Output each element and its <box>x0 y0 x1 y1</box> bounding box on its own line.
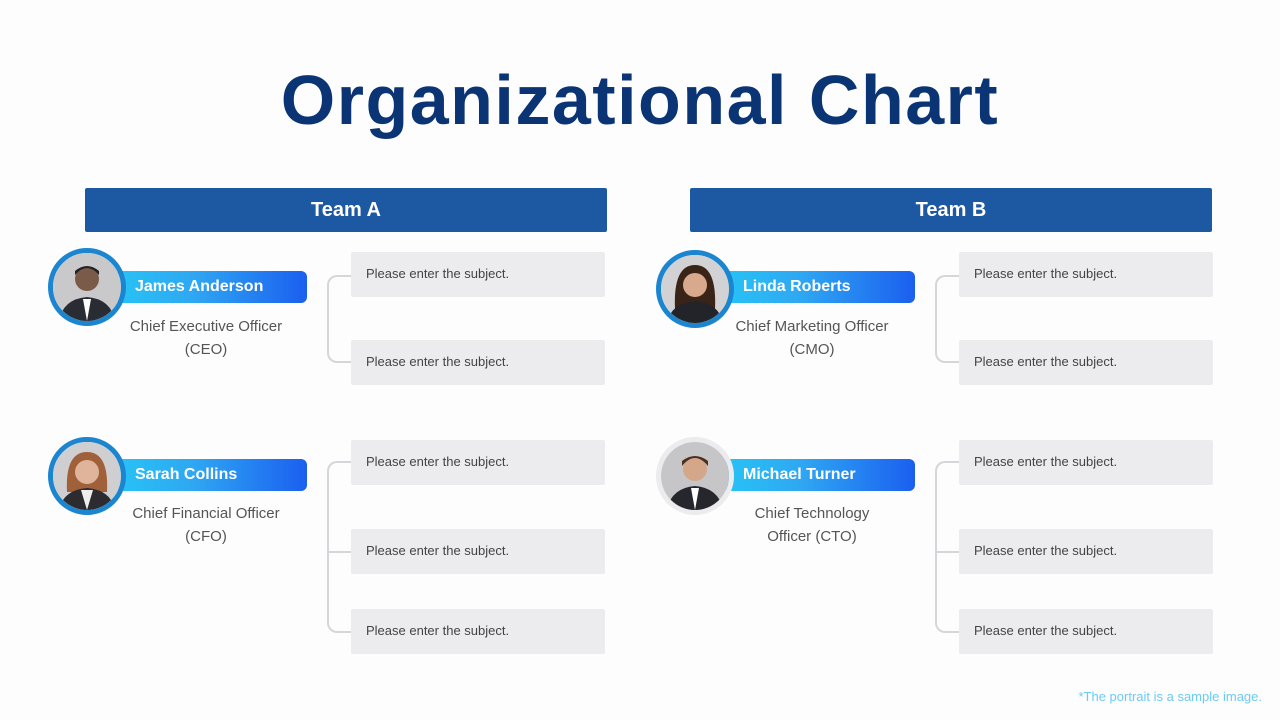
name pill: Michael Turner <box>743 466 856 483</box>
subject boxes: Please enter the subject. <box>974 266 1117 281</box>
subject boxes: Please enter the subject. <box>366 623 509 638</box>
portrait <box>656 250 734 328</box>
role: (CMO) <box>790 341 834 358</box>
person: Sarah Collins <box>48 437 307 545</box>
role: (CEO) <box>185 341 227 358</box>
subject boxes: Please enter the subject. <box>366 543 509 558</box>
person: Michael Turner <box>656 437 915 545</box>
name pill: James Anderson <box>135 278 263 295</box>
role <box>130 318 282 358</box>
role: (CFO) <box>185 528 227 545</box>
person: Linda Roberts <box>656 250 915 358</box>
role <box>132 505 280 545</box>
subject boxes: Please enter the subject. <box>366 454 509 469</box>
footnote: *The portrait is a sample image. <box>1078 689 1262 704</box>
name pill <box>723 271 915 303</box>
header: Team B: Team B <box>916 199 986 221</box>
connector <box>935 461 959 633</box>
subject boxes: Please enter the subject. <box>366 266 509 281</box>
connector <box>327 461 351 633</box>
name pill: Linda Roberts <box>743 278 851 295</box>
subject boxes <box>351 440 605 654</box>
subject boxes <box>351 252 605 385</box>
subject boxes: Please enter the subject. <box>974 354 1117 369</box>
subject boxes: Please enter the subject. <box>366 354 509 369</box>
header: Team A <box>85 188 607 232</box>
name pill <box>115 271 307 303</box>
role <box>755 505 870 545</box>
title: Organizational Chart <box>281 61 999 139</box>
role <box>735 318 889 358</box>
header: Team B <box>690 188 1212 232</box>
portrait <box>656 437 734 515</box>
subject boxes: Please enter the subject. <box>974 623 1117 638</box>
role: Chief Financial Officer <box>132 505 280 522</box>
subject boxes <box>959 252 1213 385</box>
name pill <box>115 459 307 491</box>
role: Chief Executive Officer <box>130 318 282 335</box>
person: James Anderson <box>48 248 307 358</box>
connector <box>327 275 351 363</box>
role: Chief Technology <box>755 505 869 522</box>
subject boxes <box>959 440 1213 654</box>
subject boxes: Please enter the subject. <box>974 454 1117 469</box>
name pill <box>723 459 915 491</box>
header: Team A: Team A <box>311 199 381 221</box>
portrait <box>48 437 126 515</box>
name pill: Sarah Collins <box>135 466 237 483</box>
role: Officer (CTO) <box>767 528 857 545</box>
portrait <box>48 248 126 326</box>
subject boxes: Please enter the subject. <box>974 543 1117 558</box>
connector <box>935 275 959 363</box>
role: Chief Marketing Officer <box>735 318 889 335</box>
